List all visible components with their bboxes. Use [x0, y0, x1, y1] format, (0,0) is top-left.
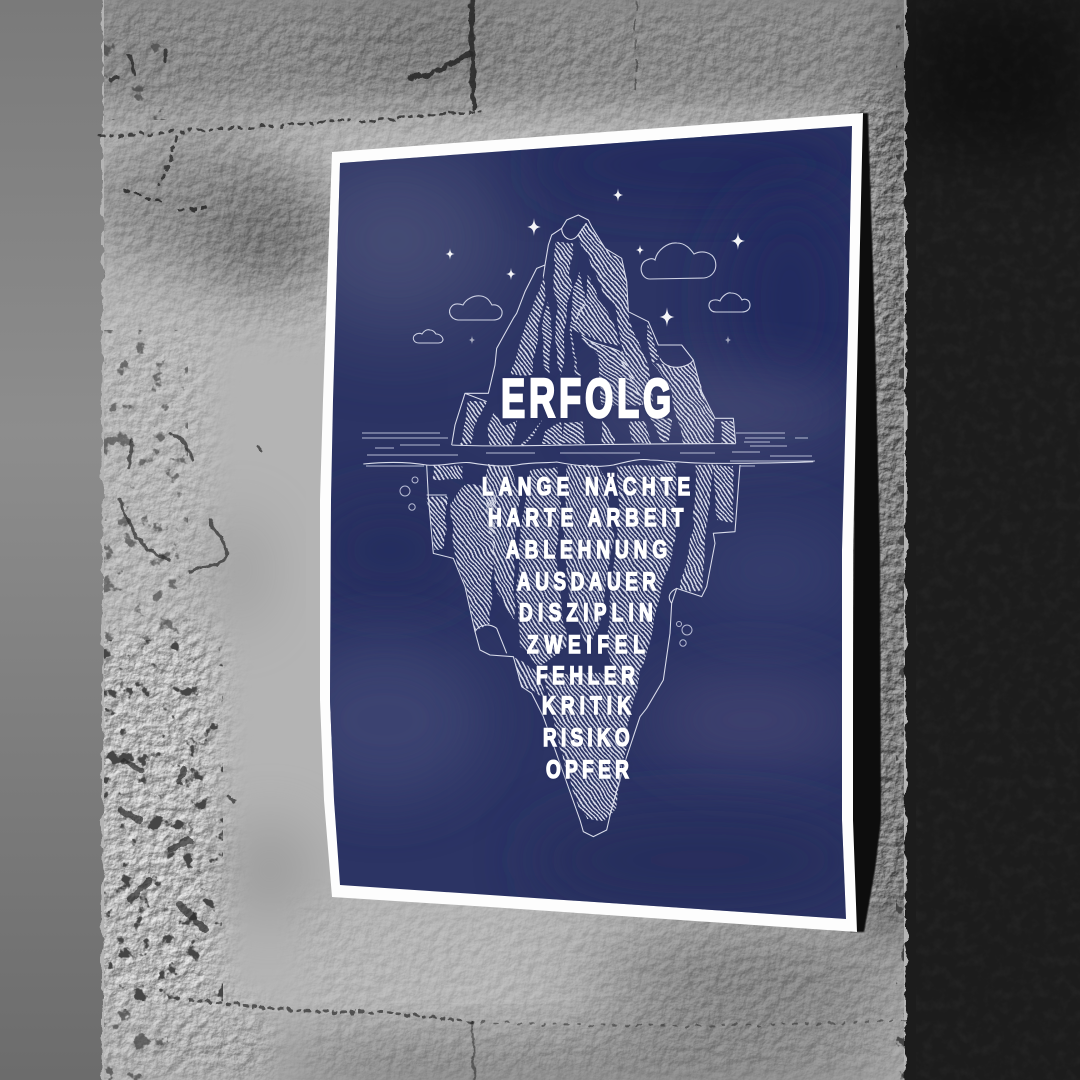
concrete shadows and highlights: [80, 0, 930, 1080]
word list: FEHLER: [536, 661, 635, 690]
dark side texture: [916, 0, 1080, 1080]
word list: HARTE ARBEIT: [488, 503, 684, 532]
cracks and block joints: [100, 0, 905, 1080]
iceberg bottom hatching: [427, 463, 733, 822]
word list: OPFER: [546, 755, 629, 784]
word list: LANGE NÄCHTE: [482, 472, 690, 501]
iceberg above water: [452, 215, 736, 446]
poster white border: [320, 113, 863, 932]
word list: DISZIPLIN: [519, 598, 653, 627]
iceberg bottom outline: [363, 459, 813, 837]
iceberg top hatching: [460, 223, 736, 445]
word list: RISIKO: [543, 723, 630, 752]
iceberg below water: [363, 459, 813, 837]
dark side shading: [910, 0, 1080, 150]
word list: KRITIK: [542, 691, 631, 720]
word list: ABLEHNUNG: [506, 535, 667, 564]
water lines: [362, 433, 815, 466]
cloud: large right: [641, 243, 716, 279]
cloud: mid left: [450, 296, 502, 320]
title: ERFOLG: [501, 367, 671, 429]
iceberg top outline: [452, 215, 736, 446]
concrete pillar: [80, 0, 932, 1080]
word list: AUSDAUER: [517, 567, 656, 596]
stars: [445, 188, 745, 344]
poster navy field: [330, 126, 852, 919]
concrete relief: [100, 0, 912, 1080]
concrete pits: [100, 0, 912, 1080]
bubbles: [400, 477, 692, 646]
word list: [482, 472, 690, 784]
cloud: small right: [709, 293, 750, 312]
word list: ZWEIFEL: [527, 630, 645, 659]
cloud: small left: [413, 330, 443, 343]
poster cast shadow: [850, 113, 881, 932]
clouds: [413, 243, 750, 343]
dark pillar side: [906, 0, 1080, 1080]
poster: [285, 113, 870, 932]
background: grey wall at left: [0, 0, 120, 1080]
